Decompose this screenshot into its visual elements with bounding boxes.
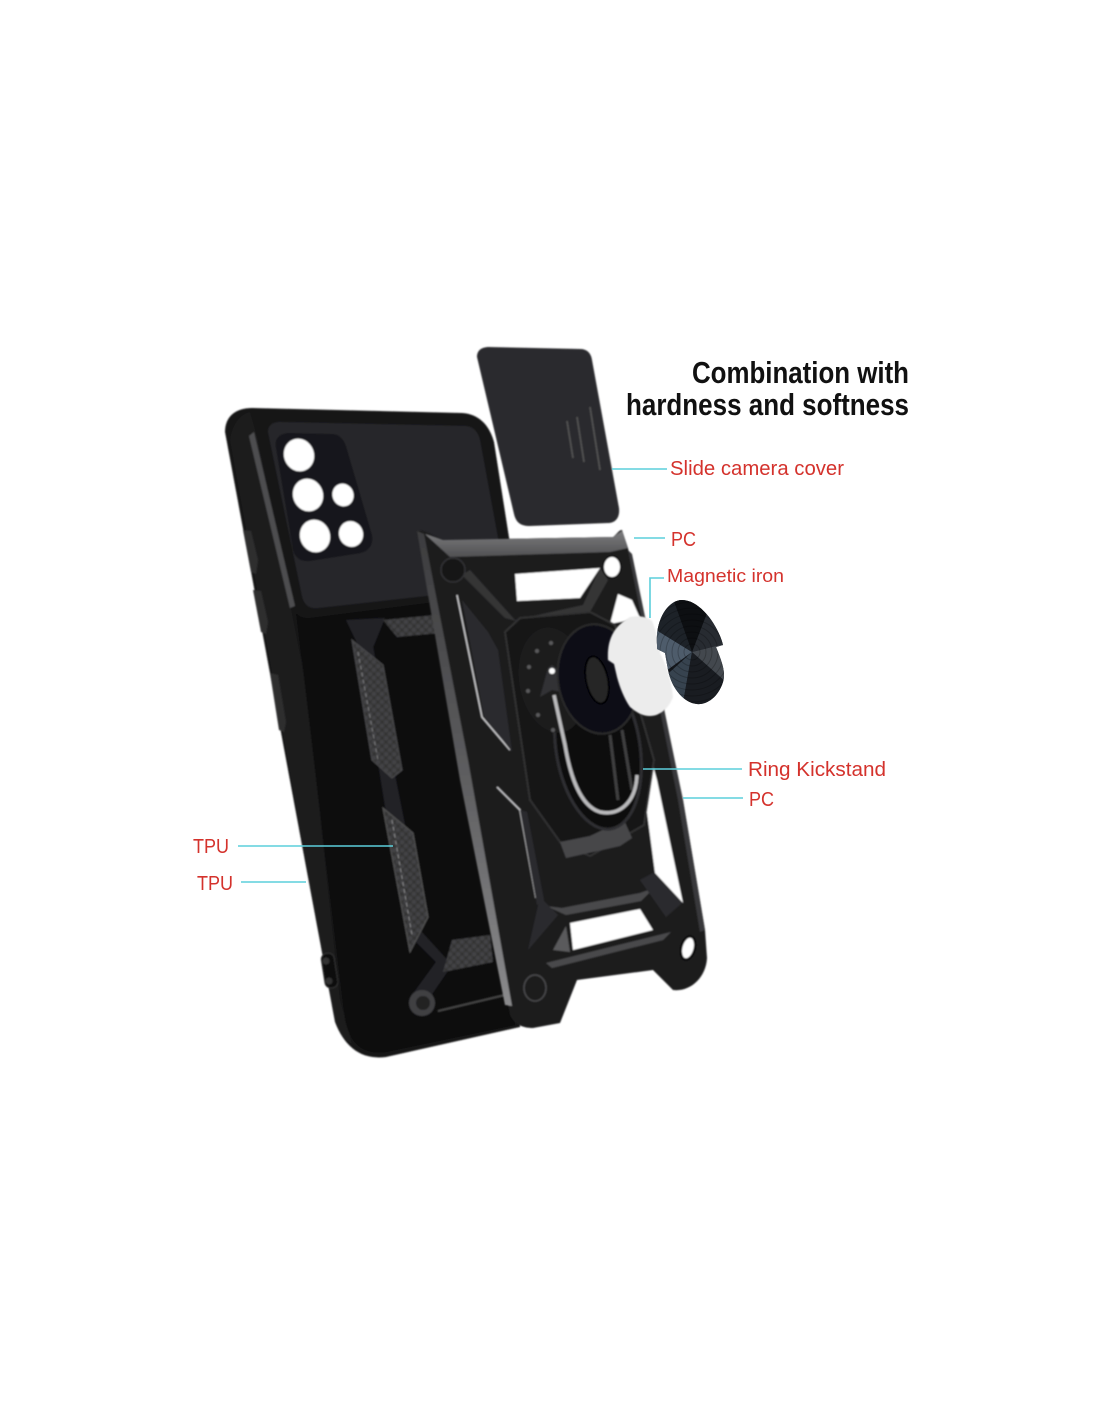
TPU pad middle bbox=[383, 808, 428, 952]
bottom left screw bbox=[524, 975, 546, 1001]
frame upper inner bar bbox=[462, 568, 608, 622]
back plate with rivets bbox=[511, 622, 595, 738]
labels: TPU bbox=[193, 836, 229, 858]
frame bottom window bbox=[570, 909, 653, 950]
title: hardness and softness bbox=[626, 387, 909, 422]
frame top window bbox=[515, 568, 600, 601]
phone left side band bbox=[230, 412, 352, 1044]
labels bbox=[193, 458, 886, 895]
frame left panel highlights bbox=[457, 595, 536, 898]
frame top bar bbox=[425, 531, 628, 557]
disc concentric brushing bbox=[656, 602, 724, 702]
bottom right hole bbox=[678, 935, 698, 961]
phone case bbox=[225, 408, 522, 1057]
camera slider panel bbox=[268, 422, 507, 608]
case back panel bbox=[296, 590, 515, 1052]
phone body bbox=[225, 408, 522, 1057]
phone side highlight bbox=[249, 432, 295, 608]
camera lenses bbox=[279, 434, 367, 557]
frame bottom bars bbox=[546, 888, 671, 968]
title: Combination with bbox=[692, 355, 909, 390]
labels: PC bbox=[749, 789, 774, 811]
labels: Magnetic iron bbox=[667, 566, 784, 586]
metal disc bbox=[656, 600, 724, 704]
top left screw bbox=[441, 558, 465, 582]
labels: TPU bbox=[197, 873, 233, 895]
base block bbox=[560, 820, 632, 858]
TPU pad top bbox=[383, 615, 440, 637]
armor frame bbox=[417, 530, 707, 1028]
TPU arms bbox=[346, 618, 505, 1012]
frame body bbox=[417, 530, 707, 1028]
cover plate bbox=[477, 347, 619, 526]
camera slider surround bbox=[258, 417, 514, 618]
cover slider grooves bbox=[567, 407, 600, 470]
callout lines bbox=[238, 469, 743, 882]
top right hole bbox=[603, 556, 621, 578]
central hexagon mount bbox=[505, 612, 654, 856]
slide camera cover bbox=[477, 347, 619, 526]
TPU screw bbox=[409, 990, 435, 1016]
ring hinge bbox=[540, 665, 572, 697]
frame left panel bevels bbox=[462, 600, 682, 950]
frame upper right window bbox=[610, 594, 640, 624]
camera island bbox=[276, 433, 372, 561]
frame left rail highlight bbox=[417, 531, 512, 1006]
swivel disk pill slot bbox=[581, 654, 613, 706]
infographic: exploded phone case diagram bbox=[193, 346, 908, 1059]
TPU pad bottom bbox=[443, 935, 493, 972]
labels: Slide camera cover bbox=[670, 458, 844, 480]
frame lower right window bbox=[644, 755, 683, 903]
bottom port bbox=[320, 952, 339, 989]
recess vertical grooves bbox=[610, 730, 632, 800]
metal ring bbox=[554, 695, 637, 813]
frame right rail bevel bbox=[628, 550, 705, 932]
title bbox=[626, 355, 909, 422]
TPU pad upper bbox=[352, 640, 402, 778]
labels: PC bbox=[671, 529, 696, 551]
swivel disk bbox=[550, 618, 646, 740]
magnetic iron plate bbox=[608, 616, 673, 716]
oblong ring recess bbox=[544, 660, 652, 836]
side buttons bbox=[243, 530, 286, 732]
disc sectors bbox=[656, 600, 724, 704]
labels: Ring Kickstand bbox=[748, 759, 886, 781]
